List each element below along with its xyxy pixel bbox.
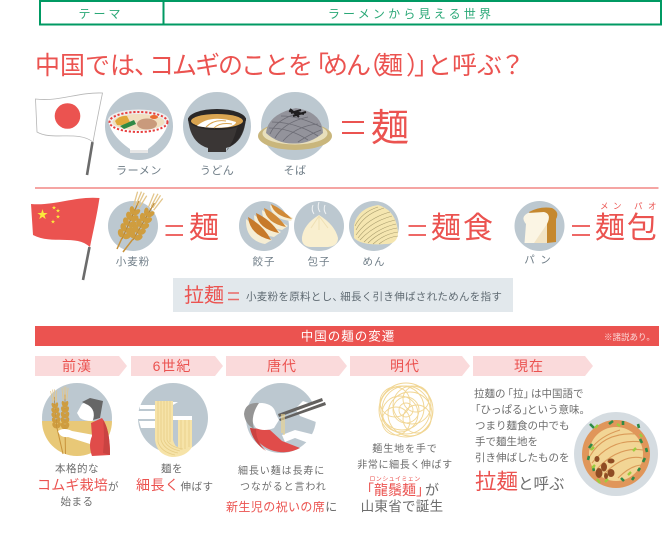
equals: men-bao: パ <box>634 201 643 211</box>
labels: Japanese noodles: ラーメン <box>116 165 162 177</box>
text: present: 「ひっぱる」という意味。 <box>470 404 590 416</box>
labels: Japanese noodles: そば <box>284 164 306 177</box>
text: present: 手で麺生地を <box>475 435 538 448</box>
icon: baozi <box>294 201 344 251</box>
equals: men-shoku: 麺食 <box>431 212 495 245</box>
text: former Han <box>37 462 119 508</box>
equals: flour men <box>166 212 219 245</box>
timeline arrow: Ming: 明代 <box>390 358 420 374</box>
icon: Japan flag <box>36 93 102 175</box>
labels: flour foods: 餃子 <box>252 256 276 268</box>
text: 6th century: 細長く伸ばす <box>136 477 214 493</box>
timeline arrow: Ming <box>350 356 470 376</box>
callout: definition of lamian <box>173 278 513 312</box>
icon: China flag: ★ <box>37 209 48 221</box>
text: present <box>470 387 590 494</box>
icon: gyoza <box>239 201 293 251</box>
section bar: history of noodles: 中国の麺の変遷 <box>301 328 395 344</box>
section bar: history of noodles <box>35 326 659 346</box>
icon: dragon-beard noodle ball <box>379 383 433 437</box>
timeline arrow: former Han: 前漢 <box>62 358 92 374</box>
text: present: つまり麺食の中でも <box>475 419 570 432</box>
text: present: 拉麺と呼ぶ <box>475 470 565 494</box>
icon: bread <box>514 201 564 251</box>
label: bread: パン <box>524 254 556 266</box>
equals: men-bao: オ <box>648 201 657 211</box>
title: 中国では、コムギのことを「めん（麺）」と呼ぶ？ <box>35 52 525 80</box>
timeline arrow: present: 現在 <box>514 358 544 374</box>
labels: flour foods <box>252 255 386 268</box>
text: Ming: 「龍鬚麺」が <box>360 482 440 498</box>
timeline arrow: present <box>473 356 593 376</box>
timeline arrow: former Han <box>35 356 127 376</box>
icon: eating noodles <box>244 383 326 453</box>
text: Ming: 麺生地を手で <box>372 442 438 455</box>
equals: men-bao: 麺包 <box>595 212 659 245</box>
callout: definition of lamian: 小麦粉を原料とし、細長く引き伸ばされためんを指す <box>246 290 502 303</box>
text: Tang <box>226 464 338 514</box>
text: Tang: 細長い麺は長寿に <box>238 464 325 477</box>
label: flour: 小麦粉 <box>116 255 150 268</box>
labels: flour foods: 包子 <box>308 255 330 268</box>
icon: noodles <box>349 201 399 251</box>
icon: China flag: ★ <box>52 205 57 210</box>
icon: China flag: ★ <box>56 208 61 213</box>
equals: men (Japan): 麺 <box>371 108 409 150</box>
icon: soba <box>258 92 332 160</box>
text: Ming: 山東省で誕生 <box>361 499 443 514</box>
header bar: theme <box>40 1 661 24</box>
header bar: theme: ラーメンから見える世界 <box>328 7 494 21</box>
text: Ming <box>357 442 453 514</box>
timeline arrow: 6th century: 6世紀 <box>153 358 191 374</box>
text: Ming: 非常に細長く伸ばす <box>357 458 453 471</box>
text: 6th century: 麺を <box>161 462 183 475</box>
text: present: 引き伸ばしたものを <box>475 451 570 464</box>
equals: men-bao: メ <box>600 201 609 211</box>
equals: men-bao: ン <box>613 201 622 211</box>
labels: Japanese noodles: うどん <box>200 164 234 177</box>
icon: farmer with wheat <box>42 383 112 456</box>
timeline arrow: Tang: 唐代 <box>267 358 297 374</box>
equals: flour men: 麺 <box>189 212 219 245</box>
text: 6th century <box>136 462 214 493</box>
text: Tang: 新生児の祝いの席に <box>226 500 338 514</box>
text: Tang: つながると言われ <box>240 480 327 493</box>
icon: udon <box>183 92 251 160</box>
text: former Han: 始まる <box>60 495 94 508</box>
header bar: theme: テーマ <box>78 7 124 21</box>
callout: definition of lamian: 拉麺 <box>184 284 224 307</box>
icon: China flag: ★ <box>51 219 56 224</box>
equals: men-bao <box>572 201 659 245</box>
text: present: 拉麺の「拉」は中国語で <box>474 387 584 400</box>
timeline arrow: 6th century <box>131 356 223 376</box>
text: former Han: 本格的な <box>55 462 99 475</box>
icon: wheat <box>108 189 166 252</box>
section bar: history of noodles: ※諸説あり。 <box>604 332 655 342</box>
text: former Han: コムギ栽培が <box>37 477 119 493</box>
icon: ramen <box>105 92 173 160</box>
labels: flour foods: めん <box>362 256 386 268</box>
labels: Japanese noodles <box>116 164 306 177</box>
equals: men (Japan) <box>342 108 409 150</box>
icon: stretching noodles <box>138 383 208 457</box>
timeline arrow: Tang <box>226 356 347 376</box>
icon: bowl of lamian <box>574 412 658 496</box>
icon: China flag <box>31 198 100 280</box>
icon: China flag: ★ <box>56 214 61 219</box>
text: Ming: ロンシュイミェン <box>369 477 421 483</box>
